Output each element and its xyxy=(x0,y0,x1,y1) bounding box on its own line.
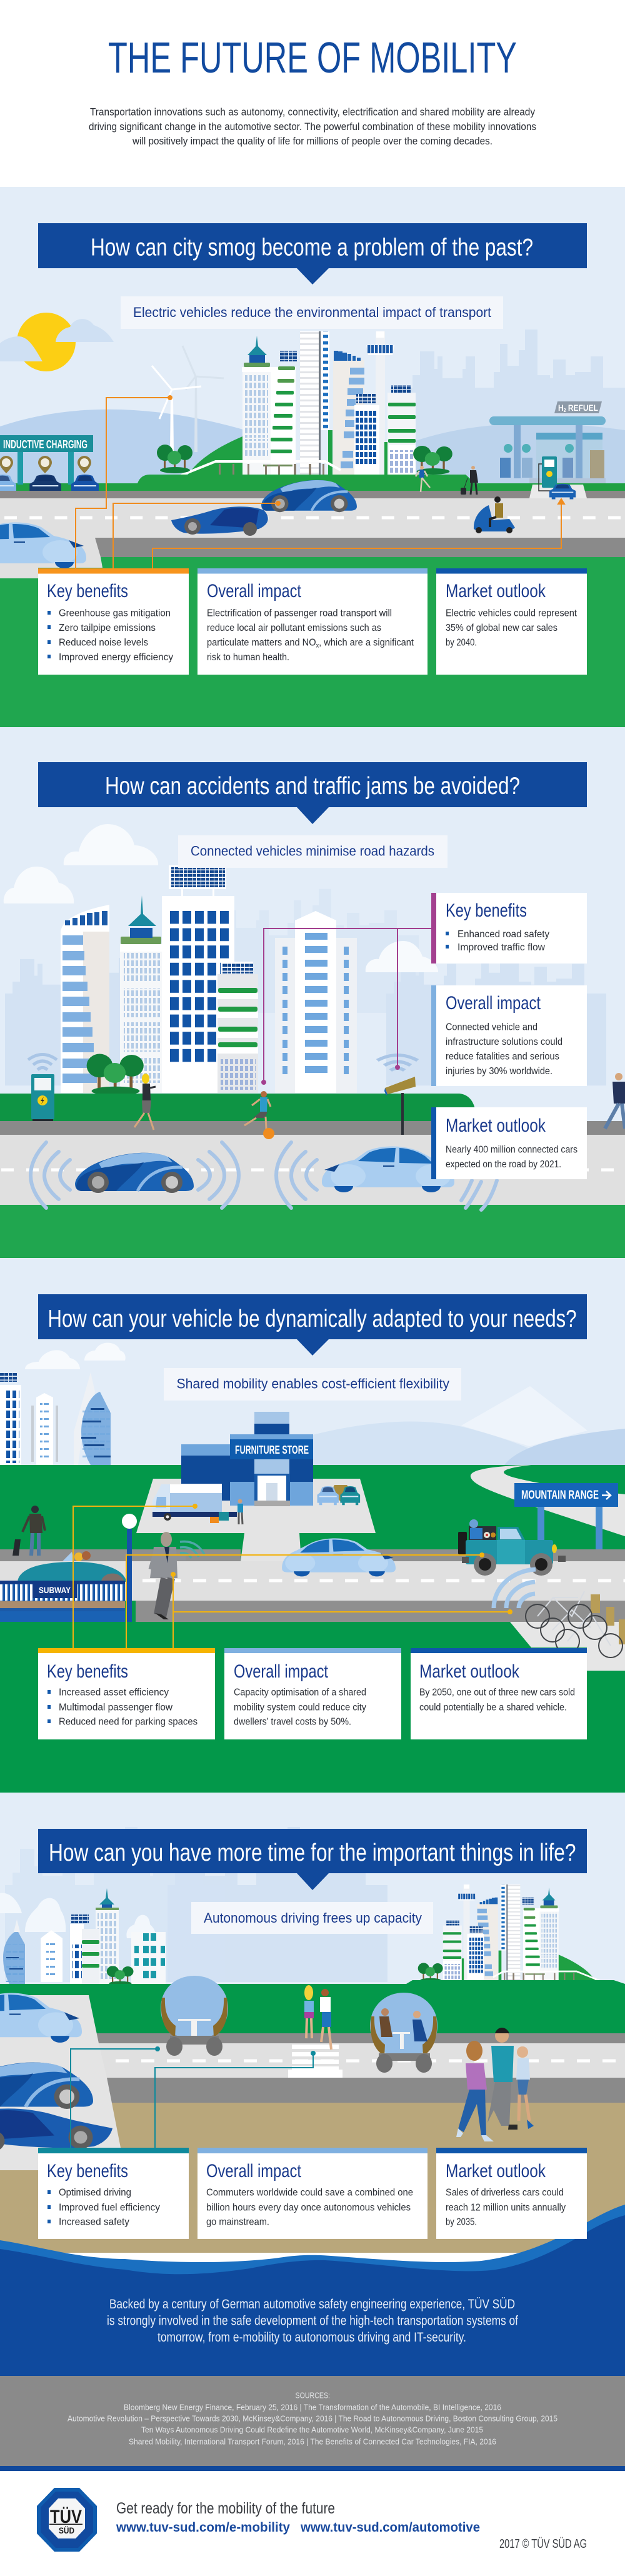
card: overall impact: infrastructure solutions could xyxy=(446,1037,562,1047)
station forecourt xyxy=(529,485,587,498)
vehicle: future car xyxy=(261,480,357,512)
signal arcs near bikes xyxy=(494,1569,536,1608)
trees left xyxy=(157,445,192,473)
vehicle: shared light car xyxy=(282,1538,396,1576)
vehicle: hydrogen car at pump xyxy=(549,484,576,499)
sky background xyxy=(0,1793,625,1986)
hill pale xyxy=(312,1422,562,1466)
person: woman with phone xyxy=(134,1074,156,1130)
panel: city smog section xyxy=(0,187,625,727)
card: key benefits: Optimised driving xyxy=(59,2187,131,2198)
vehicle: scooter with rider xyxy=(474,496,515,533)
distant skyline xyxy=(405,330,625,485)
company statement: tomorrow, from e-mobility to autonomous driving and IT-security. xyxy=(158,2330,466,2345)
footer links: www.tuv-sud.com/e-mobility xyxy=(116,2520,290,2535)
left city xyxy=(3,1888,166,1986)
card: overall impact: x xyxy=(316,643,319,649)
card: key benefits xyxy=(38,2148,189,2239)
right hill xyxy=(416,423,625,485)
vehicle: light electric car xyxy=(0,523,86,568)
card: overall impact: Capacity optimisation of a shared xyxy=(234,1687,366,1698)
ground green xyxy=(0,1465,625,1793)
card: market outlook: Nearly 400 million connected cars xyxy=(446,1144,578,1155)
card: market outlook: Sales of driverless cars could xyxy=(446,2187,564,2198)
card: overall impact: Overall impact xyxy=(206,2161,302,2181)
panel: accidents and traffic section xyxy=(0,727,625,1258)
card: key benefits xyxy=(38,1648,215,1739)
vehicle: sports car xyxy=(171,506,268,536)
hydrogen station: REFUEL xyxy=(566,403,598,413)
hydrogen station: H xyxy=(558,403,564,413)
card: market outlook: Market outlook xyxy=(446,581,546,601)
card: market outlook: By 2050, one out of three new cars sold xyxy=(419,1687,575,1698)
bicycles xyxy=(526,1591,625,1658)
intro text xyxy=(89,106,536,147)
camera on pole xyxy=(378,1055,418,1135)
card: overall impact: dwellers’ travel costs by 50%. xyxy=(234,1717,351,1727)
card: overall impact: Connected vehicle and xyxy=(446,1022,538,1033)
card: market outlook: expected on the road by 2021. xyxy=(446,1159,561,1170)
cloud left of sun xyxy=(0,336,42,361)
card: overall impact: billion hours every day once autonomous vehicles xyxy=(206,2202,411,2213)
panel: heading banner xyxy=(38,762,587,824)
card: key benefits: Key benefits xyxy=(446,900,527,921)
card: market outlook: Market outlook xyxy=(446,2161,546,2181)
clouds xyxy=(4,824,438,972)
panel: shared mobility section xyxy=(0,1258,625,1793)
hydrogen station: 2 xyxy=(564,408,566,413)
ground green xyxy=(0,1094,476,1121)
panel: heading banner xyxy=(38,223,587,284)
connector lines teal xyxy=(71,2047,315,2148)
vehicle: light car on left xyxy=(0,1993,82,2043)
card: overall impact: particulate matters and NO xyxy=(207,638,326,648)
card: market outlook: reach 12 million units annually xyxy=(446,2202,566,2213)
person: businessman with tablet xyxy=(150,1532,186,1619)
ground green strip xyxy=(0,475,625,491)
logo: TÜV SÜD: TÜV xyxy=(50,2507,82,2527)
person: furniture staff and chair xyxy=(210,1499,243,1524)
vehicle: pickup with luggage xyxy=(458,1519,566,1576)
pedestrian crossing xyxy=(288,2045,342,2078)
building: furniture store xyxy=(181,1412,313,1506)
card: key benefits: Increased asset efficiency xyxy=(59,1687,169,1698)
subtitle box: Autonomous driving frees up capacity xyxy=(204,1910,422,1926)
wind turbines xyxy=(152,346,224,452)
distant skyline xyxy=(5,889,606,1085)
EV charging post xyxy=(28,1054,57,1121)
vehicle: future car on left xyxy=(0,2063,93,2109)
subtitle box: Connected vehicles minimise road hazards xyxy=(191,843,434,859)
card: market outlook: by 2040. xyxy=(446,638,477,648)
bike parking pad xyxy=(510,1622,625,1671)
panel: sources: Ten Ways Autonomous Driving Could Redefine the Automotive World, McKinsey&Company, June 2015 xyxy=(141,2426,483,2435)
blue wave light band xyxy=(0,2205,625,2376)
card: overall impact: Overall impact xyxy=(234,1661,329,1682)
card: market outlook xyxy=(436,2148,587,2239)
panel: sources xyxy=(0,2376,625,2471)
card: key benefits: Key benefits xyxy=(47,2161,128,2181)
company statement xyxy=(107,2297,518,2345)
sky background xyxy=(0,187,625,727)
family walking xyxy=(456,2028,534,2141)
intro text: Transportation innovations such as autonomy, connectivity, electrification and shared mobility are already xyxy=(90,106,536,118)
vehicle: delivery van xyxy=(152,1484,237,1521)
footer call to action: Get ready for the mobility of the future xyxy=(116,2500,335,2517)
card: key benefits: Zero tailpipe emissions xyxy=(59,623,156,633)
pod: empty table xyxy=(161,1976,228,2056)
card: overall impact xyxy=(431,985,587,1086)
subtitle box xyxy=(178,835,448,868)
mountain range sign xyxy=(514,1483,618,1549)
parked cars at store xyxy=(318,1485,360,1505)
charging location pins xyxy=(0,456,91,473)
right trees xyxy=(418,1963,443,1983)
ground green xyxy=(0,1980,625,2033)
panel: heading banner xyxy=(38,1829,587,1890)
charging canopy: INDUCTIVE CHARGING xyxy=(3,438,88,451)
person: boy with ball xyxy=(244,1091,274,1139)
couple crossing street xyxy=(304,1985,331,2050)
card: market outlook xyxy=(411,1648,587,1739)
vehicle: sports car on left xyxy=(0,2108,112,2151)
building: terraced tower xyxy=(218,962,258,1093)
card: overall impact: Electrification of passenger road transport will xyxy=(207,608,392,619)
building: white residential tower xyxy=(275,911,357,1093)
panel: heading banner xyxy=(38,1294,587,1356)
card: overall impact: reduce local air pollutant emissions such as xyxy=(207,623,381,633)
connector lines orange xyxy=(76,396,564,568)
building: teal roof tower xyxy=(120,895,162,1093)
intro text: will positively impact the quality of life for millions of people over the coming decades. xyxy=(132,136,492,147)
subtitle box xyxy=(164,1368,461,1401)
road xyxy=(0,1549,625,1622)
card: key benefits: Improved energy efficiency xyxy=(59,652,173,663)
intro text: driving significant change in the automotive sector. The powerful combination of these mobility innovations xyxy=(89,121,536,133)
card: market outlook xyxy=(436,568,587,675)
card: market outlook: 35% of global new car sales xyxy=(446,623,558,633)
panel: sources: Shared Mobility, International Transport Forum, 2016 | The Benefits of Connected Car Technologies, FIA, 2016 xyxy=(129,2437,496,2446)
distant mountain xyxy=(461,1386,588,1446)
card: overall impact xyxy=(224,1648,401,1739)
panel: sources: Automotive Revolution – Perspective Towards 2030, McKinsey&Company, 2016 | The Road to Autonomous Driving, Boston Consulting Group, 2015 xyxy=(68,2415,558,2423)
card: key benefits: Improved traffic flow xyxy=(458,942,545,953)
building: furniture store: FURNITURE STORE xyxy=(235,1444,309,1456)
card: key benefits: Greenhouse gas mitigation xyxy=(59,608,171,619)
vehicle: connected future car xyxy=(75,1153,194,1193)
hydrogen station xyxy=(489,401,606,483)
card: market outlook: Market outlook xyxy=(419,1661,520,1682)
subtitle box xyxy=(121,296,503,329)
card: key benefits: Key benefits xyxy=(47,581,128,601)
furniture store parking lot xyxy=(136,1479,376,1561)
city buildings xyxy=(181,331,416,475)
card: overall impact: Overall impact xyxy=(446,993,541,1014)
card: market outlook: Market outlook xyxy=(446,1115,546,1136)
person: runner xyxy=(416,466,430,492)
card: overall impact xyxy=(198,568,428,675)
subtitle box: Electric vehicles reduce the environmental impact of transport xyxy=(133,304,491,320)
card: key benefits: Improved fuel efficiency xyxy=(59,2202,160,2213)
icon: sun xyxy=(17,313,76,371)
card: overall impact: risk to human health. xyxy=(207,652,289,663)
clouds xyxy=(0,1893,156,1938)
building: large office with solar roof xyxy=(162,865,234,1093)
charging canopy xyxy=(0,435,93,485)
hill blue xyxy=(504,1429,625,1466)
sky background xyxy=(0,1258,625,1471)
connector lines yellow xyxy=(73,1504,512,1648)
signal arcs near businessman xyxy=(180,1541,205,1558)
vehicle: connected light car xyxy=(322,1147,454,1192)
card: key benefits: Enhanced road safety xyxy=(458,929,549,940)
panel: sources: Bloomberg New Energy Finance, February 25, 2016 | The Transformation of the Automobile, BI Intelligence, 2016 xyxy=(124,2403,501,2412)
card: market outlook: Electric vehicles could represent xyxy=(446,608,578,619)
copyright: 2017 © TÜV SÜD AG xyxy=(499,2537,587,2551)
clouds xyxy=(25,1343,126,1369)
card: market outlook: could potentially be a shared vehicle. xyxy=(419,1702,567,1713)
trees xyxy=(87,1054,144,1095)
subway entrance railing xyxy=(0,1581,125,1622)
card: market outlook xyxy=(431,1107,587,1179)
card: market outlook: by 2035. xyxy=(446,2217,477,2227)
card: key benefits: Key benefits xyxy=(47,1661,128,1682)
left city xyxy=(0,1372,111,1465)
company statement: Backed by a century of German automotive safety engineering experience, TÜV SÜD xyxy=(109,2297,515,2312)
footer links: www.tuv-sud.com/automotive xyxy=(300,2520,480,2535)
card: overall impact: Overall impact xyxy=(207,581,302,601)
road xyxy=(0,1121,625,1258)
parked cars xyxy=(0,475,99,495)
card: key benefits xyxy=(431,893,587,963)
card: overall impact: go mainstream. xyxy=(206,2217,269,2227)
card: overall impact xyxy=(198,2148,428,2239)
person: man walking xyxy=(605,1073,625,1129)
subtitle box xyxy=(191,1902,433,1934)
connector lines purple xyxy=(262,928,431,1084)
subtitle box: Shared mobility enables cost-efficient flexibility xyxy=(176,1376,449,1392)
card: overall impact: injuries by 30% worldwide. xyxy=(446,1066,552,1077)
trees right xyxy=(413,446,452,475)
pod: couple meeting xyxy=(370,1993,438,2073)
blue wave dark band xyxy=(0,2215,625,2376)
road and ground xyxy=(0,1995,625,2253)
EV charger xyxy=(539,456,557,491)
subway entrance railing: SUBWAY xyxy=(39,1585,71,1595)
building: curved tower xyxy=(61,905,109,1093)
card: key benefits: Reduced need for parking spaces xyxy=(59,1717,198,1727)
panel: heading banner: How can city smog become a problem of the past? xyxy=(91,234,533,261)
cloud right of sun xyxy=(56,319,114,342)
card: key benefits: Multimodal passenger flow xyxy=(59,1702,172,1713)
card: overall impact: Commuters worldwide could save a combined one xyxy=(206,2187,413,2198)
card: overall impact: mobility system could reduce city xyxy=(234,1702,366,1713)
logo: TÜV SÜD xyxy=(37,2488,97,2552)
vehicle: convertible xyxy=(18,1551,126,1582)
card: key benefits: Increased safety xyxy=(59,2217,129,2227)
right city xyxy=(443,1884,599,1981)
card: overall impact: , which are a significant xyxy=(319,638,414,648)
footer links xyxy=(116,2520,480,2535)
logo: TÜV SÜD: SÜD xyxy=(59,2525,74,2535)
company statement: is strongly involved in the safe development of the high-tech transportation systems of xyxy=(107,2313,518,2328)
sky background xyxy=(0,727,625,1209)
panel: autonomous driving section xyxy=(0,1793,625,2376)
street lamp xyxy=(122,1514,137,1622)
asphalt and road xyxy=(0,491,625,727)
card: key benefits: Reduced noise levels xyxy=(59,638,148,648)
panel: sources: SOURCES: xyxy=(295,2391,330,2400)
signal arcs: connected cars xyxy=(31,1142,497,1210)
person: traveller with suitcase xyxy=(461,466,478,495)
left hill xyxy=(0,410,243,488)
person: traveller with suitcase xyxy=(12,1506,45,1556)
card: overall impact: reduce fatalities and serious xyxy=(446,1052,559,1062)
card: key benefits xyxy=(38,568,189,675)
winding road to mountains xyxy=(471,1465,625,1536)
distant skyline xyxy=(5,1827,388,1982)
panel: heading banner: How can accidents and traffic jams be avoided? xyxy=(105,773,520,800)
